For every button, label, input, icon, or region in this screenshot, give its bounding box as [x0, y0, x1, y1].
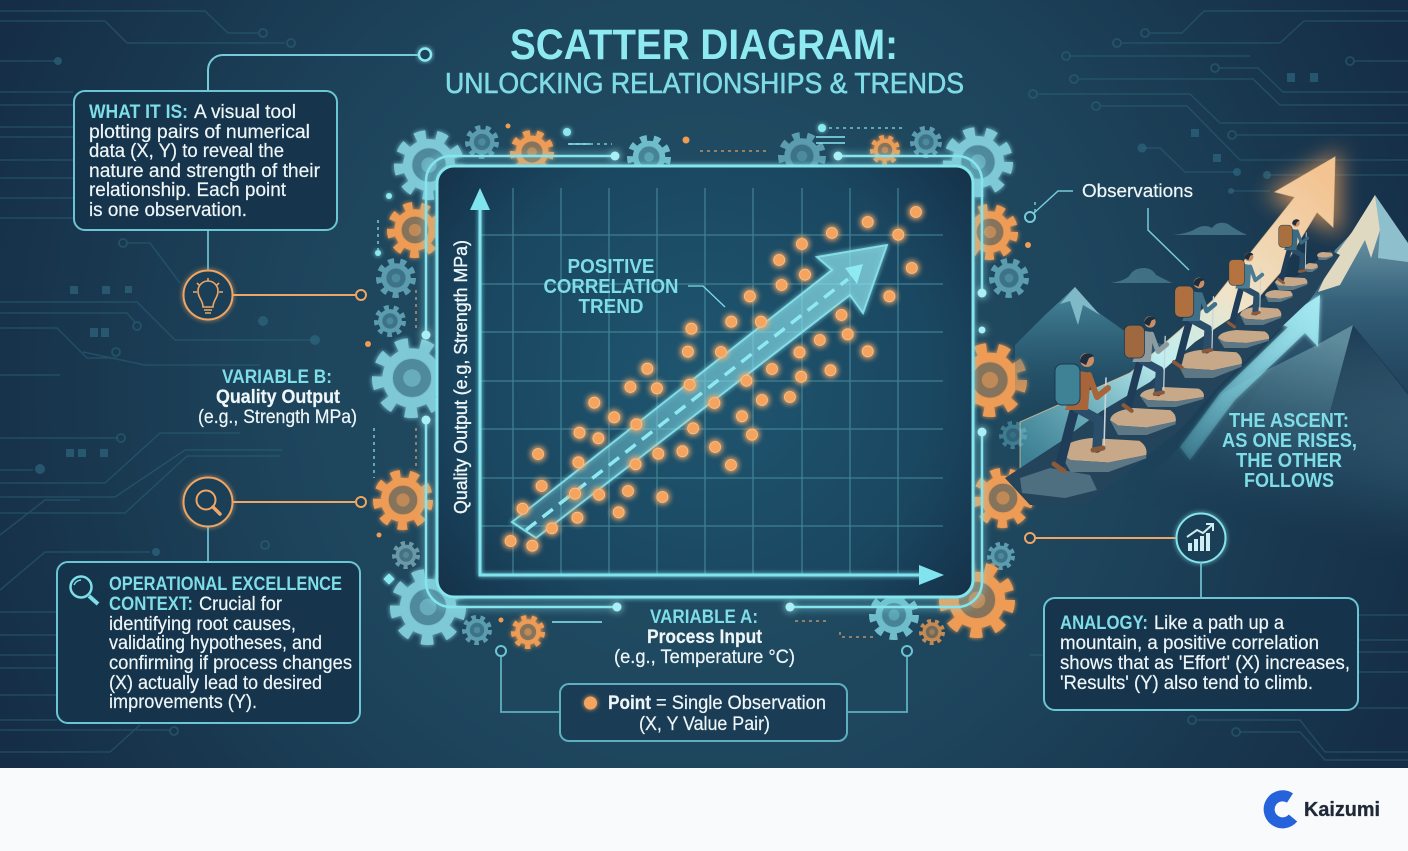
legend text: (X, Y Value Pair)	[639, 714, 770, 735]
icon: growth chart	[1025, 514, 1226, 597]
legend dot	[584, 696, 597, 710]
callout text: plotting pairs of numerical	[89, 122, 310, 143]
legend text: Point	[608, 693, 652, 714]
legend connectors	[501, 657, 907, 712]
callout text: data (X, Y) to reveal the	[89, 141, 284, 162]
callout text: validating hypotheses, and	[109, 633, 322, 654]
callout text: 'Results' (Y) also tend to climb.	[1060, 673, 1313, 694]
title line 2: UNLOCKING RELATIONSHIPS & TRENDS	[445, 68, 964, 100]
legend text	[608, 693, 826, 735]
legend: point	[496, 646, 912, 741]
the ascent caption: THE ASCENT:	[1229, 410, 1349, 432]
right mountain	[1200, 195, 1408, 500]
lit face	[1318, 195, 1380, 292]
icon: magnifier small	[70, 576, 98, 604]
snow face	[1375, 195, 1408, 262]
gears around chart frame	[365, 124, 1035, 646]
variable b label: Quality Output	[216, 387, 341, 408]
variable b label: (e.g., Strength MPa)	[198, 407, 357, 428]
trend label pointer	[688, 286, 725, 307]
trend arrow	[512, 245, 887, 538]
title line 1: SCATTER DIAGRAM:	[510, 21, 898, 69]
panel: scatter chart	[437, 166, 973, 597]
callout text: improvements (Y).	[109, 692, 257, 713]
cream rising arrow	[1020, 157, 1335, 470]
cyan rising arrow	[1180, 295, 1320, 460]
title	[445, 21, 964, 100]
axes	[470, 188, 944, 585]
chart background	[437, 166, 973, 597]
callout text: Like a path up a	[1154, 613, 1284, 634]
logo mark	[1269, 796, 1293, 823]
lower rock	[1020, 468, 1097, 498]
variable b label: VARIABLE B:	[222, 367, 332, 388]
connector rings	[496, 646, 912, 656]
connector ring	[419, 48, 431, 60]
callout text: ANALOGY:	[1060, 613, 1148, 634]
variable a label: VARIABLE A:	[650, 607, 758, 628]
glow behind arrow	[1265, 150, 1340, 235]
what it is callout	[74, 48, 431, 230]
callout text: is one observation.	[89, 200, 247, 221]
callout text: mountain, a positive correlation	[1060, 633, 1319, 654]
callout text: A visual tool	[194, 102, 296, 123]
callout text: confirming if process changes	[109, 653, 352, 674]
footer band	[0, 768, 1408, 851]
variable a label	[614, 607, 795, 668]
kaizumi logo	[1269, 796, 1380, 823]
icon: magnifier	[184, 478, 366, 562]
trend label: POSITIVE	[568, 256, 654, 278]
callout box	[57, 562, 360, 723]
illustration: mountain ascent	[1005, 150, 1408, 560]
the ascent caption: FOLLOWS	[1244, 470, 1334, 492]
callout text: Crucial for	[199, 594, 283, 615]
back mountain	[1015, 287, 1165, 430]
callout text: shows that as 'Effort' (X) increases,	[1060, 653, 1350, 674]
the ascent caption: THE OTHER	[1236, 450, 1343, 472]
trend label: CORRELATION	[544, 276, 678, 298]
icon: light bulb	[184, 230, 366, 320]
callout text: (X) actually lead to desired	[109, 673, 322, 694]
callout text	[89, 102, 321, 221]
connector to title	[208, 55, 418, 90]
callout text: WHAT IT IS:	[89, 102, 188, 123]
front mountain	[1110, 325, 1408, 560]
callout text: nature and strength of their	[89, 161, 321, 182]
trend label: TREND	[578, 296, 644, 318]
chart frame	[422, 152, 986, 612]
analogy callout	[1044, 598, 1358, 710]
callout text: identifying root causes,	[109, 614, 296, 635]
variable b label	[198, 367, 357, 428]
callout text: relationship. Each point	[89, 180, 287, 201]
callout text: OPERATIONAL EXCELLENCE	[109, 574, 342, 595]
data points	[505, 206, 921, 551]
y axis label: Quality Output (e.g, Strength MPa)	[451, 240, 471, 514]
legend box	[560, 684, 847, 741]
back mountain snow	[1060, 287, 1100, 325]
chart grid	[480, 188, 943, 575]
rock slope	[1005, 250, 1340, 505]
operational excellence callout	[57, 562, 360, 723]
callout box	[1044, 598, 1358, 710]
observations label: Observations	[1082, 181, 1193, 201]
callout box	[74, 91, 337, 230]
stone steps	[1060, 252, 1333, 472]
callout text	[1060, 613, 1350, 694]
the ascent caption: AS ONE RISES,	[1222, 430, 1357, 452]
callout text: CONTEXT:	[109, 594, 193, 615]
variable a label: (e.g., Temperature °C)	[614, 647, 795, 668]
variable a label: Process Input	[647, 627, 763, 648]
front mountain dark face	[1300, 325, 1408, 530]
clouds	[1110, 223, 1247, 283]
callout text	[109, 574, 352, 713]
trend label	[544, 256, 678, 318]
hikers	[1054, 219, 1307, 471]
the ascent caption	[1222, 410, 1357, 492]
legend text: = Single Observation	[656, 693, 826, 714]
logo text: Kaizumi	[1304, 799, 1380, 821]
observations label	[1025, 181, 1193, 270]
